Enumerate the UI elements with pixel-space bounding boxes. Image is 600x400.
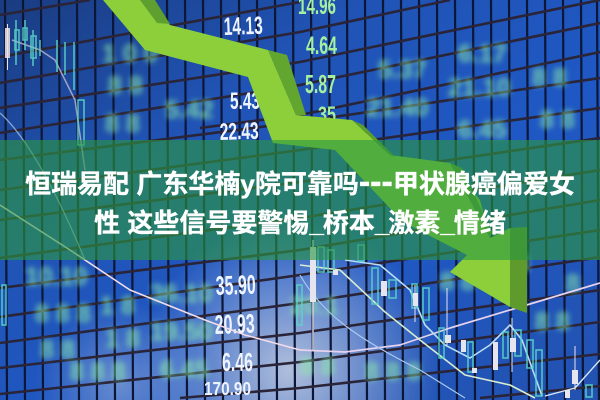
blurred green stock figures: 5.42 — [165, 96, 214, 124]
blurred green stock figures: 1 8 — [100, 292, 135, 320]
white and green stock figures: 35 — [318, 102, 336, 127]
blurred green stock figures: 8 8 — [40, 336, 75, 364]
blurred green stock figures: 8 8 — [105, 110, 140, 138]
blurred green stock figures: 8 8 — [532, 64, 567, 92]
blurred green stock figures: 8 — [566, 270, 580, 298]
blurred green stock figures: 8 8 — [535, 308, 570, 336]
green downward arrow — [103, 0, 527, 313]
green band behind title — [0, 140, 600, 260]
blurred green stock figures: 6.45 — [160, 356, 209, 384]
title: 恒瑞易配 广东华楠y院可靠吗---甲状腺癌偏爱女性 这些信号要警惕_桥本_激素_情绪 — [25, 163, 575, 238]
blurred green stock figures: 8 8 — [495, 250, 530, 278]
white and green stock figures — [204, 0, 337, 399]
blurred green stock figures: 5.37 — [378, 56, 427, 84]
blurred green stock figures: 1 0 0 — [102, 40, 158, 68]
white and green stock figures: 5.43 — [230, 88, 260, 115]
white and green stock figures: 22.43 — [219, 118, 259, 146]
white and green stock figures: 170.90 — [204, 379, 251, 399]
blurred green stock figures: 8 8 8 — [35, 300, 91, 328]
blurred green stock figures: 6.17 — [458, 40, 507, 68]
blurred green stock figures: 19.50 — [150, 318, 213, 346]
blurred green stock figures: 8 8 8 — [365, 358, 421, 386]
blurred green stock figures: 20.1 — [290, 292, 339, 320]
blurred green stock figures: 10.10 — [25, 263, 88, 291]
blurred green stock figures: 8 8 — [540, 106, 575, 134]
white and green stock figures: 14.13 — [223, 12, 263, 41]
blurred green stock figures: 36.10 — [150, 280, 213, 308]
blurred green stock figures: 8 8 8 — [70, 358, 126, 386]
blurred green stock figures: 8 8 — [300, 353, 335, 381]
blurred green stock figures: 21.40 — [366, 94, 429, 122]
white and green stock figures: 4.64 — [306, 32, 337, 60]
white and green stock figures: 35.90 — [215, 270, 256, 301]
blurred green stock figures: 21.10 — [448, 74, 511, 102]
white and green stock figures: 6.46 — [222, 347, 253, 377]
blurred green stock figures: 8 8 — [108, 72, 143, 100]
white and green stock figures: 5.87 — [305, 69, 336, 99]
blurred green stock figures: 8 8 — [440, 268, 475, 296]
blurred green stock figures: 1 8 — [105, 325, 140, 353]
white and green stock figures: 20.93 — [214, 309, 255, 340]
blurred green stock figures: 6.45 — [458, 116, 507, 144]
